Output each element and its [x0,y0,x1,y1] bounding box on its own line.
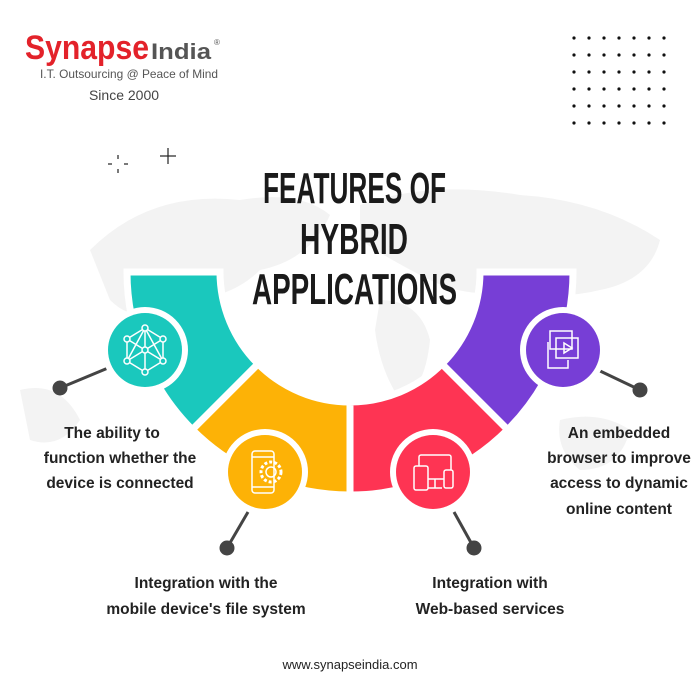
decorative crosses [108,148,176,173]
title: FEATURES OF [263,164,446,213]
icon: devices (red) [390,429,476,515]
half ring segments [127,272,573,495]
logo: I.T. Outsourcing @ Peace of Mind [40,67,218,81]
text: right feature: access to dynamic [550,475,688,492]
title: HYBRID [300,215,408,264]
text: right feature [547,425,691,518]
logo [25,29,220,103]
decorative dot grid [572,36,666,125]
logo: Since 2000 [89,87,159,103]
icon: browser video (purple) [520,307,606,393]
title: APPLICATIONS [252,265,457,314]
background world map [20,189,660,470]
icon: phone gear (yellow) [222,429,308,515]
text: left feature: device is connected [46,475,194,492]
logo: Synapse [25,29,149,67]
logo: India [151,39,212,64]
text: bottom right feature [416,575,564,618]
text: left feature [44,425,197,492]
logo: ® [214,38,220,47]
connector lines [54,368,646,554]
icon: network (teal) [102,307,188,393]
text: right feature: browser to improve [547,450,691,467]
text: bottom right feature: Integration with [432,575,548,592]
title [252,164,457,314]
footer url: www.synapseindia.com [281,657,418,672]
text: right feature: An embedded [568,425,670,442]
text: bottom left feature: Integration with the [135,575,278,592]
text: right feature: online content [566,501,672,518]
text: left feature: The ability to [64,425,160,442]
text: bottom left feature [106,575,306,618]
text: bottom left feature: mobile device's file system [106,601,306,618]
text: bottom right feature: Web-based services [416,601,564,618]
text: left feature: function whether the [44,450,197,467]
